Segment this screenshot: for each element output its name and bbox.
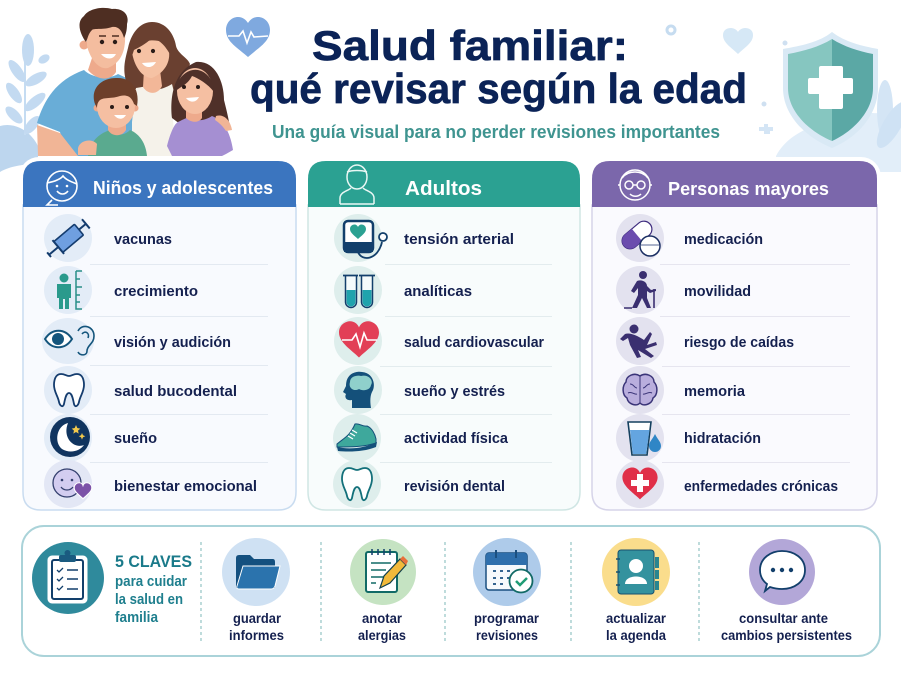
item: programar revisiones: revisiones bbox=[476, 628, 538, 643]
row: salud cardiovascular: salud cardiovascular bbox=[404, 335, 544, 351]
row: sueño y estrés: sueño y estrés bbox=[404, 384, 505, 400]
row: sueño: sueño bbox=[114, 431, 157, 447]
row: medicación bbox=[616, 214, 763, 262]
icon: shield with cross bbox=[783, 32, 878, 148]
row: tensión arterial bbox=[334, 214, 514, 262]
item: consultar ante cambios persistentes bbox=[721, 539, 852, 643]
boy bbox=[78, 78, 147, 156]
row: memoria bbox=[616, 366, 746, 414]
row: riesgo de caídas: riesgo de caídas bbox=[684, 335, 794, 351]
row: bienestar emocional bbox=[44, 460, 257, 508]
row: analíticas: analíticas bbox=[404, 284, 472, 300]
row: salud bucodental: salud bucodental bbox=[114, 384, 237, 400]
father bbox=[37, 8, 135, 156]
icon: clipboard bbox=[32, 542, 104, 614]
row: movilidad bbox=[616, 266, 751, 314]
text: 5 claves: familia bbox=[115, 610, 159, 626]
girl bbox=[167, 62, 233, 156]
row: sueño y estrés bbox=[334, 366, 505, 414]
row: actividad física bbox=[333, 414, 509, 462]
decoration: right foliage bbox=[776, 80, 901, 172]
row: crecimiento bbox=[44, 266, 198, 314]
item: consultar ante cambios persistentes: cambios persistentes bbox=[721, 628, 852, 643]
item: consultar ante cambios persistentes: consultar ante bbox=[739, 611, 828, 626]
illustration: family portrait bbox=[37, 8, 233, 156]
item: actualizar la agenda: la agenda bbox=[606, 628, 666, 643]
item: programar revisiones bbox=[473, 538, 541, 643]
panel header: Niños y adolescentes bbox=[93, 177, 273, 198]
text: 5 claves: la salud en bbox=[115, 592, 183, 608]
panel header bbox=[592, 161, 877, 207]
row: bienestar emocional: bienestar emocional bbox=[114, 479, 257, 495]
panel: Personas mayores bbox=[588, 157, 881, 510]
row: revisión dental: revisión dental bbox=[404, 479, 505, 495]
item: anotar alergias: anotar bbox=[362, 611, 403, 626]
icon: heart with pulse bbox=[226, 17, 270, 57]
row: hidratación bbox=[616, 414, 761, 462]
item: actualizar la agenda: actualizar bbox=[606, 611, 667, 626]
panel: Adultos bbox=[304, 157, 584, 510]
item: guardar informes: guardar bbox=[233, 611, 282, 626]
title: qué revisar según la edad bbox=[250, 65, 747, 112]
item: guardar informes bbox=[222, 538, 290, 643]
row: tensión arterial: tensión arterial bbox=[404, 232, 514, 248]
text: 5 claves: 5 CLAVES bbox=[115, 552, 192, 571]
row: salud cardiovascular bbox=[334, 317, 544, 365]
mother bbox=[124, 22, 190, 156]
row: analíticas bbox=[334, 266, 472, 314]
panel: 5 claves bbox=[22, 526, 880, 656]
item: programar revisiones: programar bbox=[474, 611, 540, 626]
panel header: Adultos bbox=[405, 178, 482, 200]
panel: Niños y adolescentes bbox=[19, 157, 300, 510]
item: anotar alergias: alergias bbox=[358, 628, 406, 643]
row: vacunas bbox=[43, 214, 172, 262]
row: vacunas: vacunas bbox=[114, 232, 172, 248]
row: revisión dental bbox=[333, 460, 505, 508]
row: enfermedades crónicas bbox=[616, 460, 838, 508]
item: anotar alergias bbox=[350, 539, 416, 643]
row: riesgo de caídas bbox=[616, 317, 794, 365]
row: visión y audición bbox=[42, 318, 231, 364]
panel header bbox=[308, 161, 580, 207]
row: hidratación: hidratación bbox=[684, 431, 761, 447]
decoration: left foliage bbox=[0, 34, 51, 172]
row: enfermedades crónicas: enfermedades crónicas bbox=[684, 479, 838, 495]
row: visión y audición: visión y audición bbox=[114, 335, 231, 351]
panel header: Personas mayores bbox=[668, 178, 829, 199]
row: medicación: medicación bbox=[684, 232, 763, 248]
item: guardar informes: informes bbox=[229, 628, 284, 643]
title: Salud familiar: bbox=[312, 22, 628, 69]
subtitle: Una guía visual para no perder revisiones importantes bbox=[272, 122, 720, 142]
title bbox=[250, 22, 747, 112]
row: movilidad: movilidad bbox=[684, 284, 751, 300]
row: salud bucodental bbox=[44, 366, 237, 414]
text: 5 claves: para cuidar bbox=[115, 574, 187, 590]
item: actualizar la agenda bbox=[602, 538, 670, 643]
decoration: small hearts and sparkles bbox=[667, 26, 788, 134]
row: actividad física: actividad física bbox=[404, 431, 509, 447]
text: 5 claves bbox=[115, 552, 192, 626]
row: crecimiento: crecimiento bbox=[114, 284, 198, 300]
panel header bbox=[23, 161, 296, 207]
row: memoria: memoria bbox=[684, 384, 746, 400]
row: sueño bbox=[44, 414, 157, 462]
